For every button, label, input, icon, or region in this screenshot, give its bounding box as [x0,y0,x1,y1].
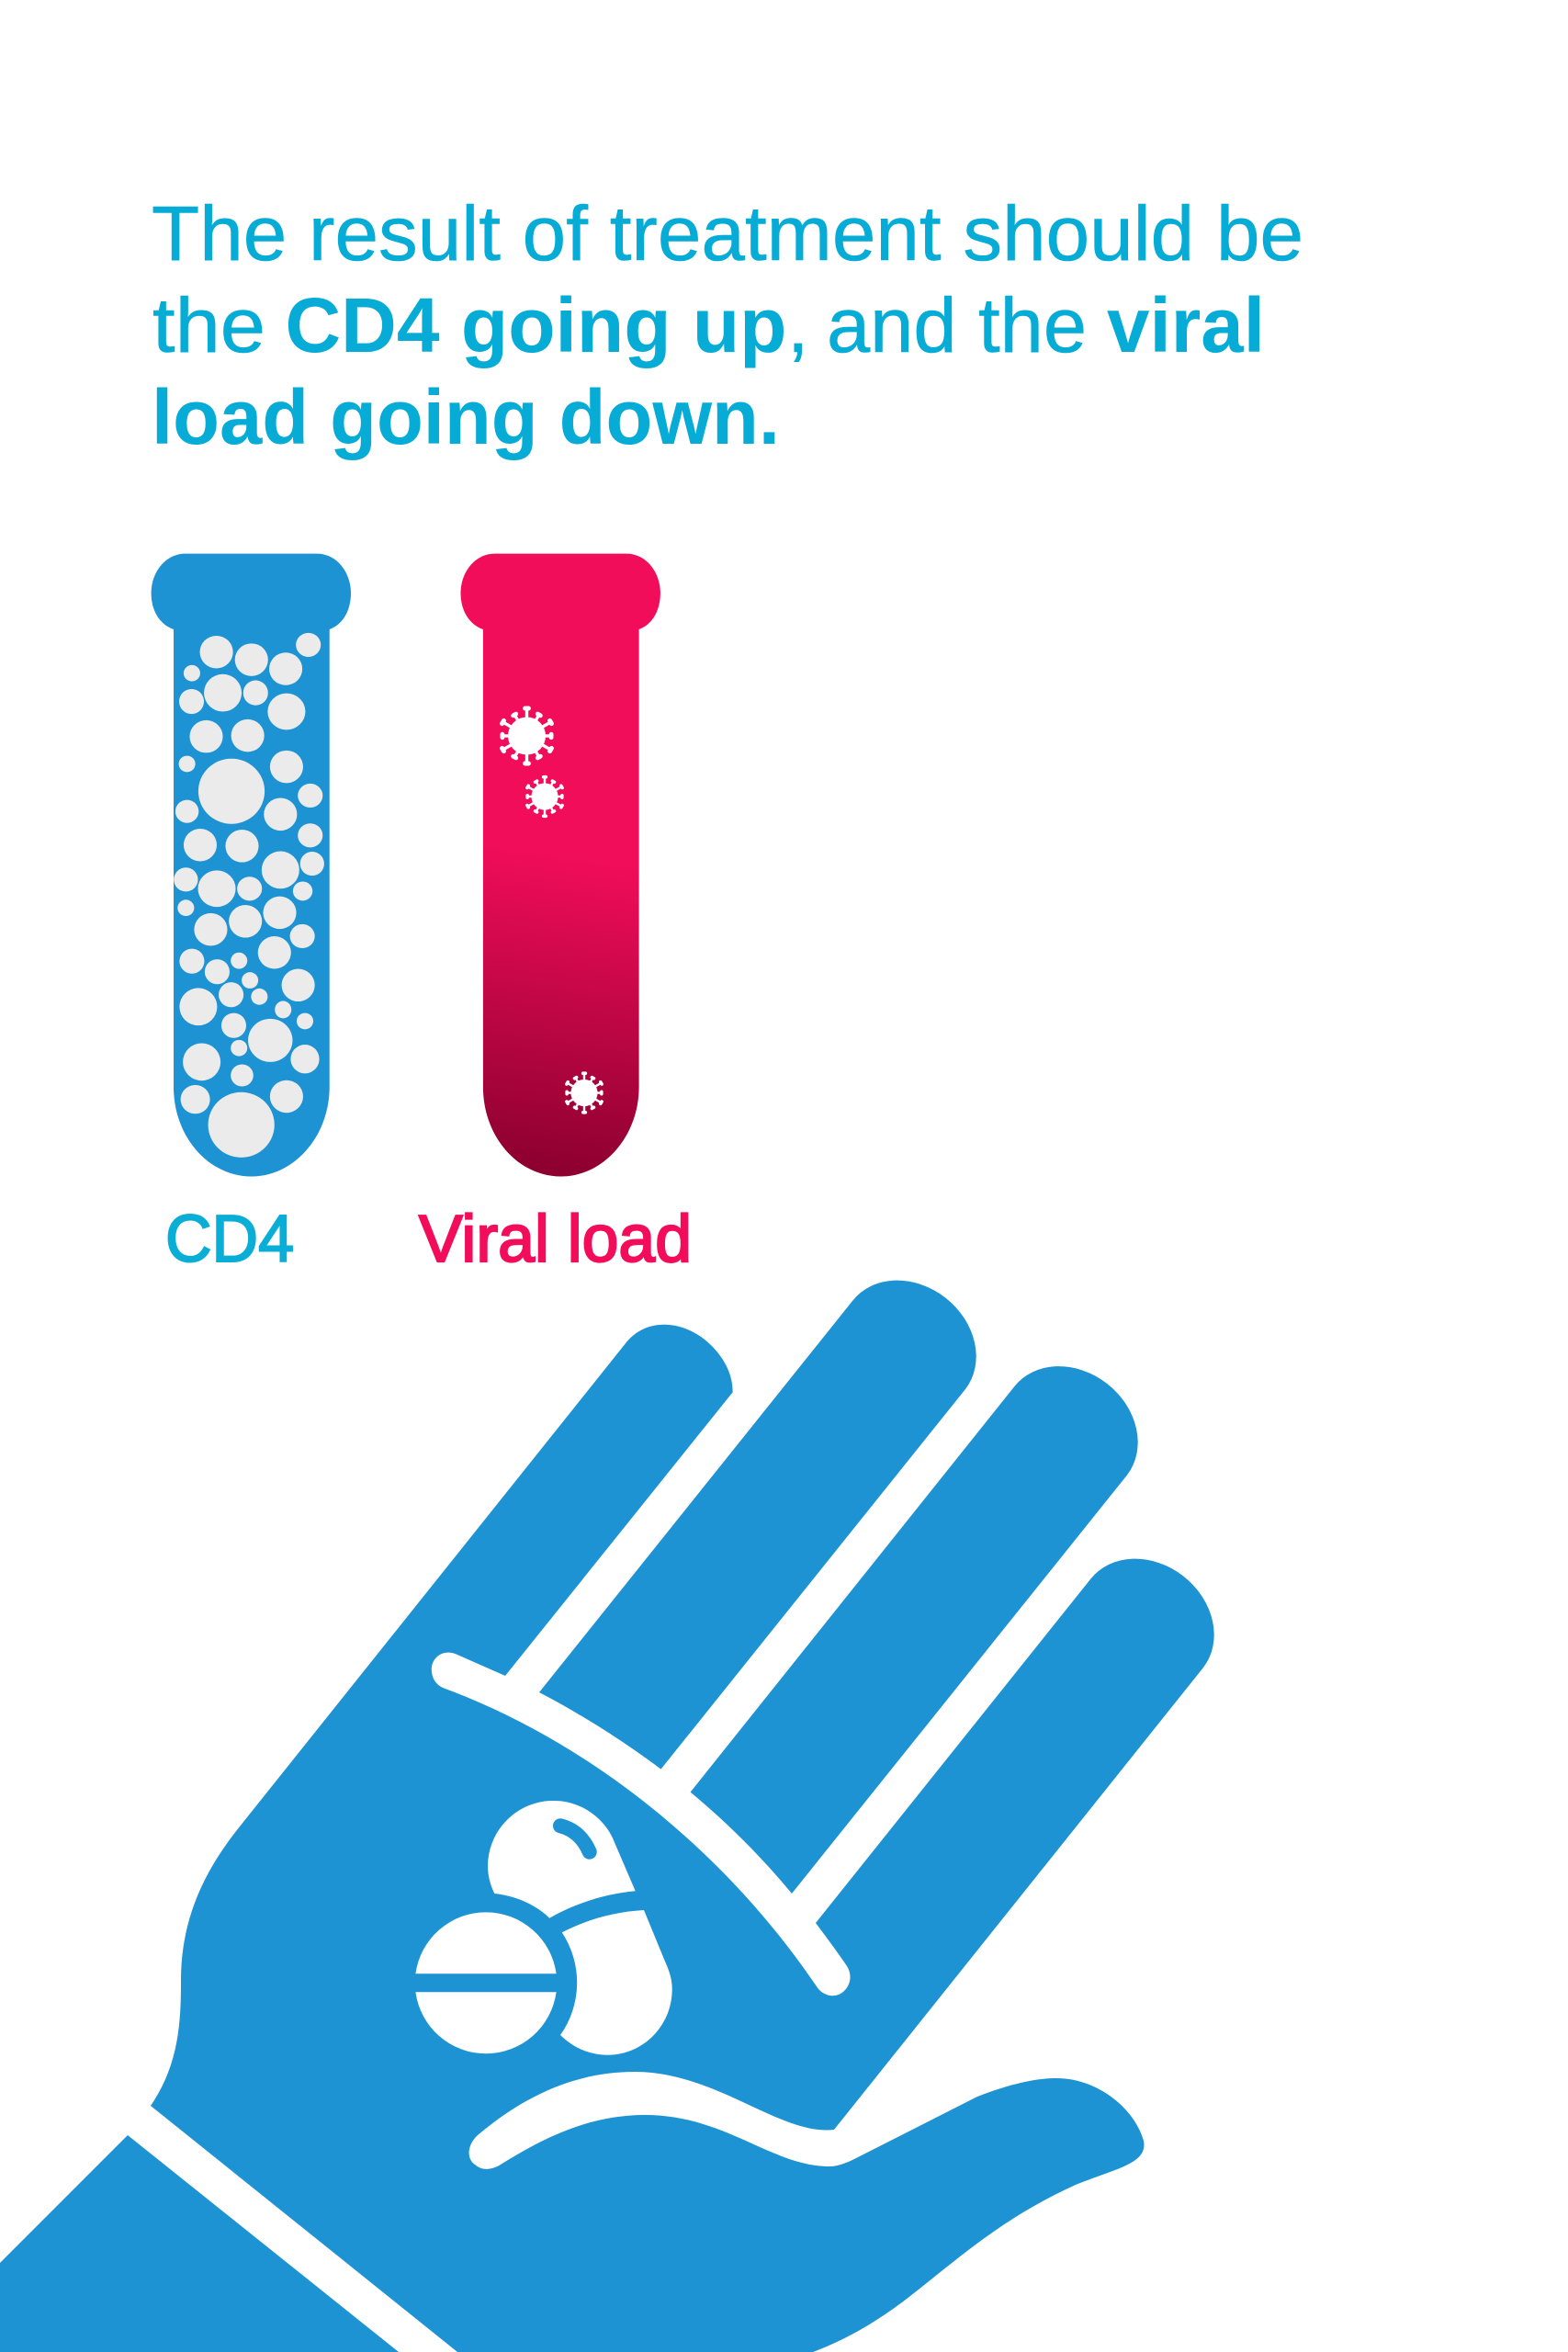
icon: tablet [415,1912,557,2053]
title: load going down. [152,374,780,460]
title: The result of treatment should be [152,190,1303,277]
hand: ring finger [691,1366,1138,1894]
icon: capsule bottom half [560,1910,672,2055]
title [152,190,1303,460]
viral load test tube [461,554,660,1176]
icon: pills [415,1801,672,2055]
hand: palm, index finger, little finger and thumb [151,1325,1214,2352]
title: and the [827,282,1087,368]
CD4 test tube [152,554,351,1176]
icon: capsule highlight [560,1826,590,1852]
illustration: hand holding pills [0,1281,1214,2352]
icon: virus large [499,706,555,766]
CD4 cells [174,633,324,1158]
icon: virus lower [564,1071,604,1114]
hand: cuff [0,2135,399,2352]
title: viral [1107,282,1265,368]
title: CD4 going up [285,282,786,368]
hand: middle finger [539,1281,976,1770]
label: viral load: Viral load [419,1203,692,1276]
icon: capsule top half [488,1801,636,1918]
title: , [787,282,808,368]
icon: virus medium [525,775,565,818]
label: CD4: CD4 [165,1203,294,1276]
title: the [152,282,265,368]
